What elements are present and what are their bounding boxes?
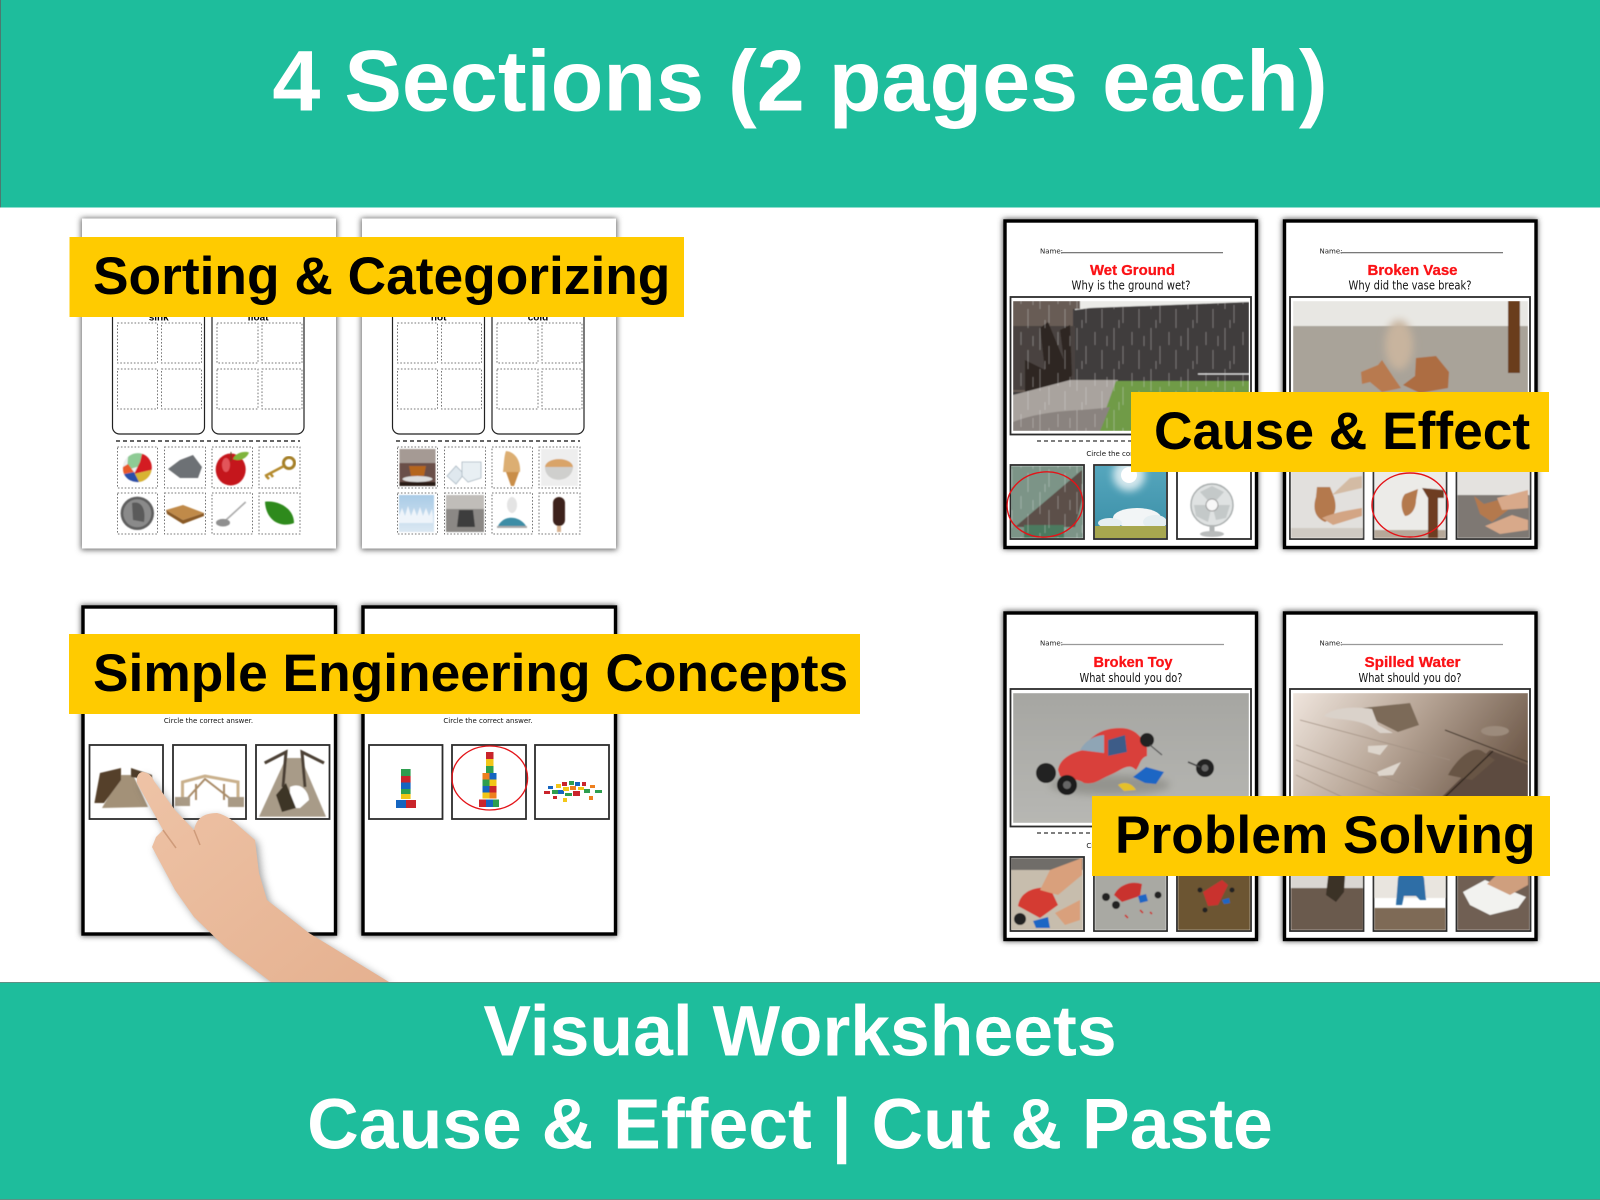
icon: ice cream cone [503, 451, 520, 486]
worksheet question: What should you do? [1080, 671, 1182, 685]
icon: ice cubes [447, 462, 481, 484]
worksheet: sink and float sorting: sink [149, 312, 169, 324]
icon: broken bridge [259, 752, 326, 817]
worksheet question: Why did the vase break? [1348, 278, 1472, 292]
photo: holding vase [1291, 466, 1363, 538]
icon: key [265, 458, 294, 479]
name line: Name: [1320, 248, 1343, 256]
icon: hot drink [541, 449, 578, 486]
icon: leaf [265, 501, 294, 525]
icon: beach ball [123, 453, 152, 482]
icon: wooden arch bridge [175, 776, 244, 807]
worksheet: sink and float sorting: float [247, 312, 269, 324]
photo: electric fan [1191, 484, 1233, 537]
worksheet: hot and cold sorting: hot [431, 312, 447, 324]
top banner [0, 0, 1600, 208]
banner line one: Visual Worksheets [483, 992, 1117, 1072]
worksheet: hot and cold sorting [361, 218, 617, 550]
worksheet title: Broken Vase [1368, 262, 1458, 279]
name line: Name: [1040, 248, 1063, 256]
photo: vase falling from table [1374, 466, 1446, 538]
instruction text: Circle the correct answer. [164, 717, 253, 725]
icon: tall block tower [479, 752, 499, 807]
icon: wood plank [166, 505, 204, 524]
worksheet title: Broken Toy [1094, 654, 1173, 671]
icon: steam iron [497, 497, 527, 528]
worksheet title: Spilled Water [1364, 654, 1461, 671]
photo: rain on roof [1011, 466, 1083, 538]
photo: repairing the car [1011, 858, 1083, 930]
photo: sunny sky [1095, 466, 1166, 538]
icon: spoon [216, 502, 246, 526]
worksheet: broken toy [1003, 611, 1258, 941]
photo: car on wooden floor [1178, 858, 1250, 930]
icon: snowy forest [399, 495, 434, 532]
worksheet: broken vase [1282, 219, 1538, 549]
banner line two: Cause & Effect | Cut & Paste [307, 1085, 1273, 1165]
worksheet question: Why is the ground wet? [1072, 278, 1190, 292]
photo: car in pieces on floor [1095, 858, 1166, 930]
photo: broken toy car [1013, 693, 1249, 823]
red answer circle [452, 746, 528, 810]
label: problem solving [1092, 796, 1550, 876]
worksheet: spilled water [1282, 611, 1538, 941]
icon: chocolate popsicle [553, 497, 565, 532]
instruction text: Circle the correct answer. [1086, 842, 1176, 850]
label: problem solving: Problem Solving [1115, 806, 1536, 865]
icon: pile of blocks [544, 781, 602, 802]
photo: walking through water [1291, 858, 1363, 930]
instruction text: Circle the correct answer. [443, 717, 533, 725]
bottom banner [0, 982, 1600, 1200]
photo: washing vase in sink [1458, 466, 1530, 538]
worksheet: bridge question [81, 605, 337, 936]
icon: apple [216, 452, 249, 486]
photo: rainy yard [1013, 301, 1249, 431]
icon: kettle [446, 495, 484, 532]
red answer circle [1372, 473, 1448, 537]
worksheet: block tower question [361, 605, 617, 936]
name line: Name: [1040, 640, 1063, 648]
worksheet question: What should you do? [1358, 671, 1462, 685]
photo: broken vase on floor [1293, 301, 1528, 392]
worksheet: wet ground [1003, 219, 1258, 549]
icon: hot tea [400, 449, 436, 486]
icon: rock [168, 455, 202, 478]
worksheet title: Wet Ground [1090, 262, 1175, 279]
name line: Name: [1320, 640, 1343, 648]
red answer circle [1003, 467, 1087, 542]
icon: coin [121, 497, 154, 530]
photo: water spill on wood [1293, 693, 1528, 796]
photo: child on wet floor [1374, 855, 1446, 930]
hand pointing [137, 772, 392, 985]
label: cause and effect [1131, 392, 1549, 472]
label: cause and effect: Cause & Effect [1154, 402, 1530, 461]
icon: short block tower [396, 769, 416, 808]
banner title: 4 Sections (2 pages each) [272, 34, 1328, 130]
worksheet: hot and cold sorting: cold [528, 312, 548, 324]
icon: sturdy bridge [94, 768, 152, 808]
instruction text: Circle the correct answer. [1086, 450, 1176, 458]
label: sorting and categorizing [70, 237, 684, 317]
label: sorting and categorizing: Sorting & Categorizing [93, 247, 670, 306]
worksheet: sink and float sorting [81, 218, 337, 550]
label: simple engineering concepts: Simple Engineering Concepts [93, 644, 848, 703]
photo: wiping with cloth [1458, 858, 1530, 930]
